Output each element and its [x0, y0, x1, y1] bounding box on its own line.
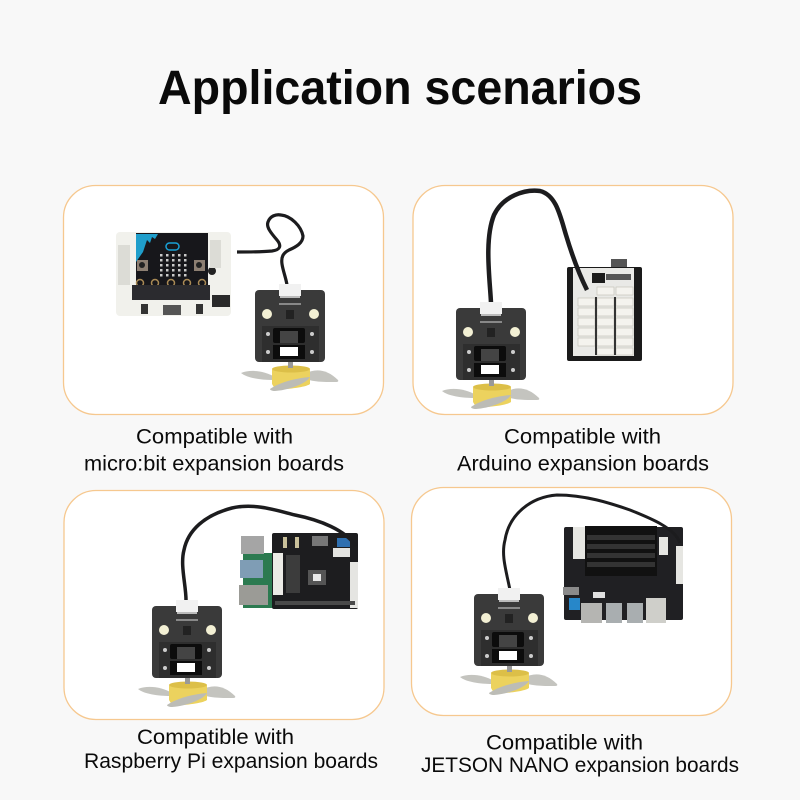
cable [488, 191, 587, 303]
panel: Jetson Nano [412, 488, 732, 716]
caption: Jetson Nano: Compatible with [486, 732, 643, 754]
title: Application scenarios [158, 62, 642, 115]
cable [183, 506, 356, 600]
fan module [442, 302, 539, 409]
panel frame [64, 490, 384, 720]
cable [237, 215, 303, 285]
caption: Raspberry Pi: Compatible with [137, 726, 294, 749]
micro:bit expansion board [116, 232, 231, 316]
panel frame [412, 488, 732, 716]
caption: Jetson Nano [421, 732, 739, 777]
cable [504, 495, 680, 590]
panel frame [64, 186, 384, 414]
panel: Arduino [413, 186, 733, 414]
panel frame [413, 186, 733, 414]
fan module [138, 600, 235, 707]
panel: micro:bit [64, 186, 384, 414]
Arduino expansion board [567, 259, 642, 361]
Jetson Nano expansion board [563, 526, 683, 623]
caption: Raspberry Pi [84, 726, 378, 773]
caption: Arduino [457, 426, 709, 476]
fan module [241, 284, 338, 391]
caption: Raspberry Pi: Raspberry Pi expansion boards [84, 750, 378, 773]
caption: micro:bit: micro:bit expansion boards [84, 452, 344, 476]
caption: micro:bit: Compatible with [136, 426, 293, 448]
caption: micro:bit [84, 426, 344, 476]
caption: Arduino: Compatible with [504, 426, 661, 448]
caption: Jetson Nano: JETSON NANO expansion boards [421, 754, 739, 777]
Raspberry Pi expansion board [239, 533, 358, 609]
caption: Arduino: Arduino expansion boards [457, 452, 709, 476]
panel: Raspberry Pi [64, 490, 384, 720]
fan module [460, 588, 557, 695]
